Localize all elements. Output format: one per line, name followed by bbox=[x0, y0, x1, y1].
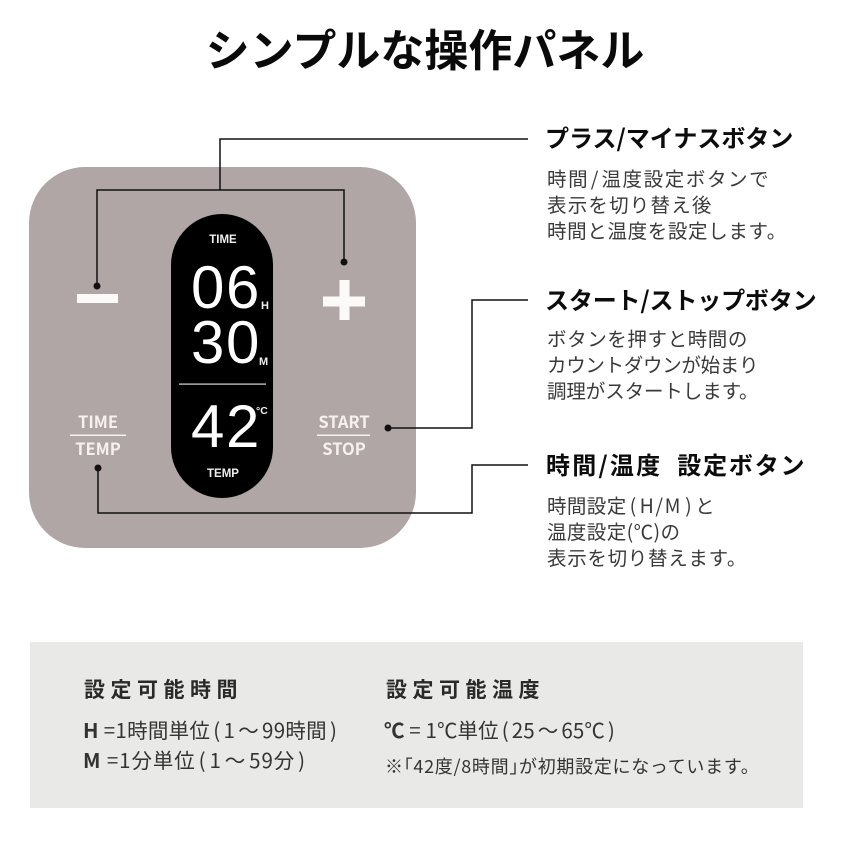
text: start stop description: 調理がスタートします。 bbox=[547, 375, 758, 404]
text: plus minus description bbox=[547, 163, 787, 244]
text: time temp description: 時間設定(H/M)と bbox=[547, 490, 715, 519]
panel body bbox=[29, 167, 416, 548]
text: plus minus description: 時間/温度設定ボタンで bbox=[547, 163, 770, 192]
display digits: minutes: 0 bbox=[226, 309, 259, 376]
button: START / STOP bbox=[317, 409, 370, 460]
display digits: temperature bbox=[191, 393, 259, 460]
button: TIME / TEMP bbox=[70, 409, 126, 460]
text: temperature range: ℃ = 1℃単位(25〜65℃) bbox=[384, 714, 615, 744]
panel: control panel diagram bbox=[29, 138, 528, 548]
arrow: start / stop leader bbox=[384, 300, 528, 432]
heading: time temp button: 時間/温度 設定ボタン bbox=[546, 446, 806, 481]
heading: start stop button: スタート/ストップボタン bbox=[545, 281, 816, 316]
text: time temp description: 温度設定(℃)の bbox=[547, 516, 680, 545]
text: hours range: H =1時間単位(1〜99時間) bbox=[83, 714, 337, 744]
text: time temp description bbox=[547, 490, 747, 571]
arrow: plus / minus leader bbox=[94, 139, 528, 290]
text: minutes range: M =1分単位(1〜59分) bbox=[83, 744, 306, 774]
text: start stop description: ボタンを押すと時間の bbox=[547, 323, 748, 352]
display pill bbox=[171, 214, 273, 498]
button: TIME / TEMP: TEMP bbox=[75, 436, 121, 460]
text: plus minus description: 時間と温度を設定します。 bbox=[547, 215, 787, 244]
button: TIME / TEMP: TIME bbox=[78, 409, 118, 433]
display digits: hours: 0 bbox=[191, 254, 224, 321]
display digits: temperature: 2 bbox=[226, 393, 259, 460]
button: START / STOP: START bbox=[318, 409, 370, 433]
text: time temp description: 表示を切り替えます。 bbox=[547, 542, 747, 571]
arrow: time / temp leader bbox=[94, 464, 528, 513]
display digits: minutes bbox=[191, 309, 259, 376]
title: シンプルな操作パネル bbox=[206, 15, 644, 79]
display digits: hours: 6 bbox=[226, 254, 259, 321]
display label: TEMP: TEMP bbox=[207, 468, 239, 480]
text: default settings note: ※｢42度/8時間｣が初期設定になっています。 bbox=[385, 753, 759, 779]
panel: settings ranges bbox=[30, 642, 803, 808]
heading: settable time: 設定可能時間 bbox=[84, 674, 243, 704]
text: start stop description bbox=[547, 323, 758, 404]
display digits: minutes: 3 bbox=[191, 309, 224, 376]
heading: settable temperature: 設定可能温度 bbox=[386, 674, 545, 704]
text: plus minus description: 表示を切り替え後 bbox=[547, 189, 713, 218]
display label: TIME: TIME bbox=[209, 234, 237, 246]
display unit: M: M bbox=[259, 356, 268, 368]
icon: plus button bbox=[323, 280, 365, 320]
icon: minus button bbox=[77, 294, 118, 303]
button: START / STOP: STOP bbox=[322, 436, 366, 460]
display unit: degrees C: °C bbox=[256, 405, 268, 417]
display digits: temperature: 4 bbox=[191, 393, 224, 460]
text: start stop description: カウントダウンが始まり bbox=[547, 349, 758, 378]
display unit: H: H bbox=[261, 300, 269, 312]
display digits: hours bbox=[191, 254, 259, 321]
heading: plus minus buttons: プラス/マイナスボタン bbox=[545, 119, 793, 154]
